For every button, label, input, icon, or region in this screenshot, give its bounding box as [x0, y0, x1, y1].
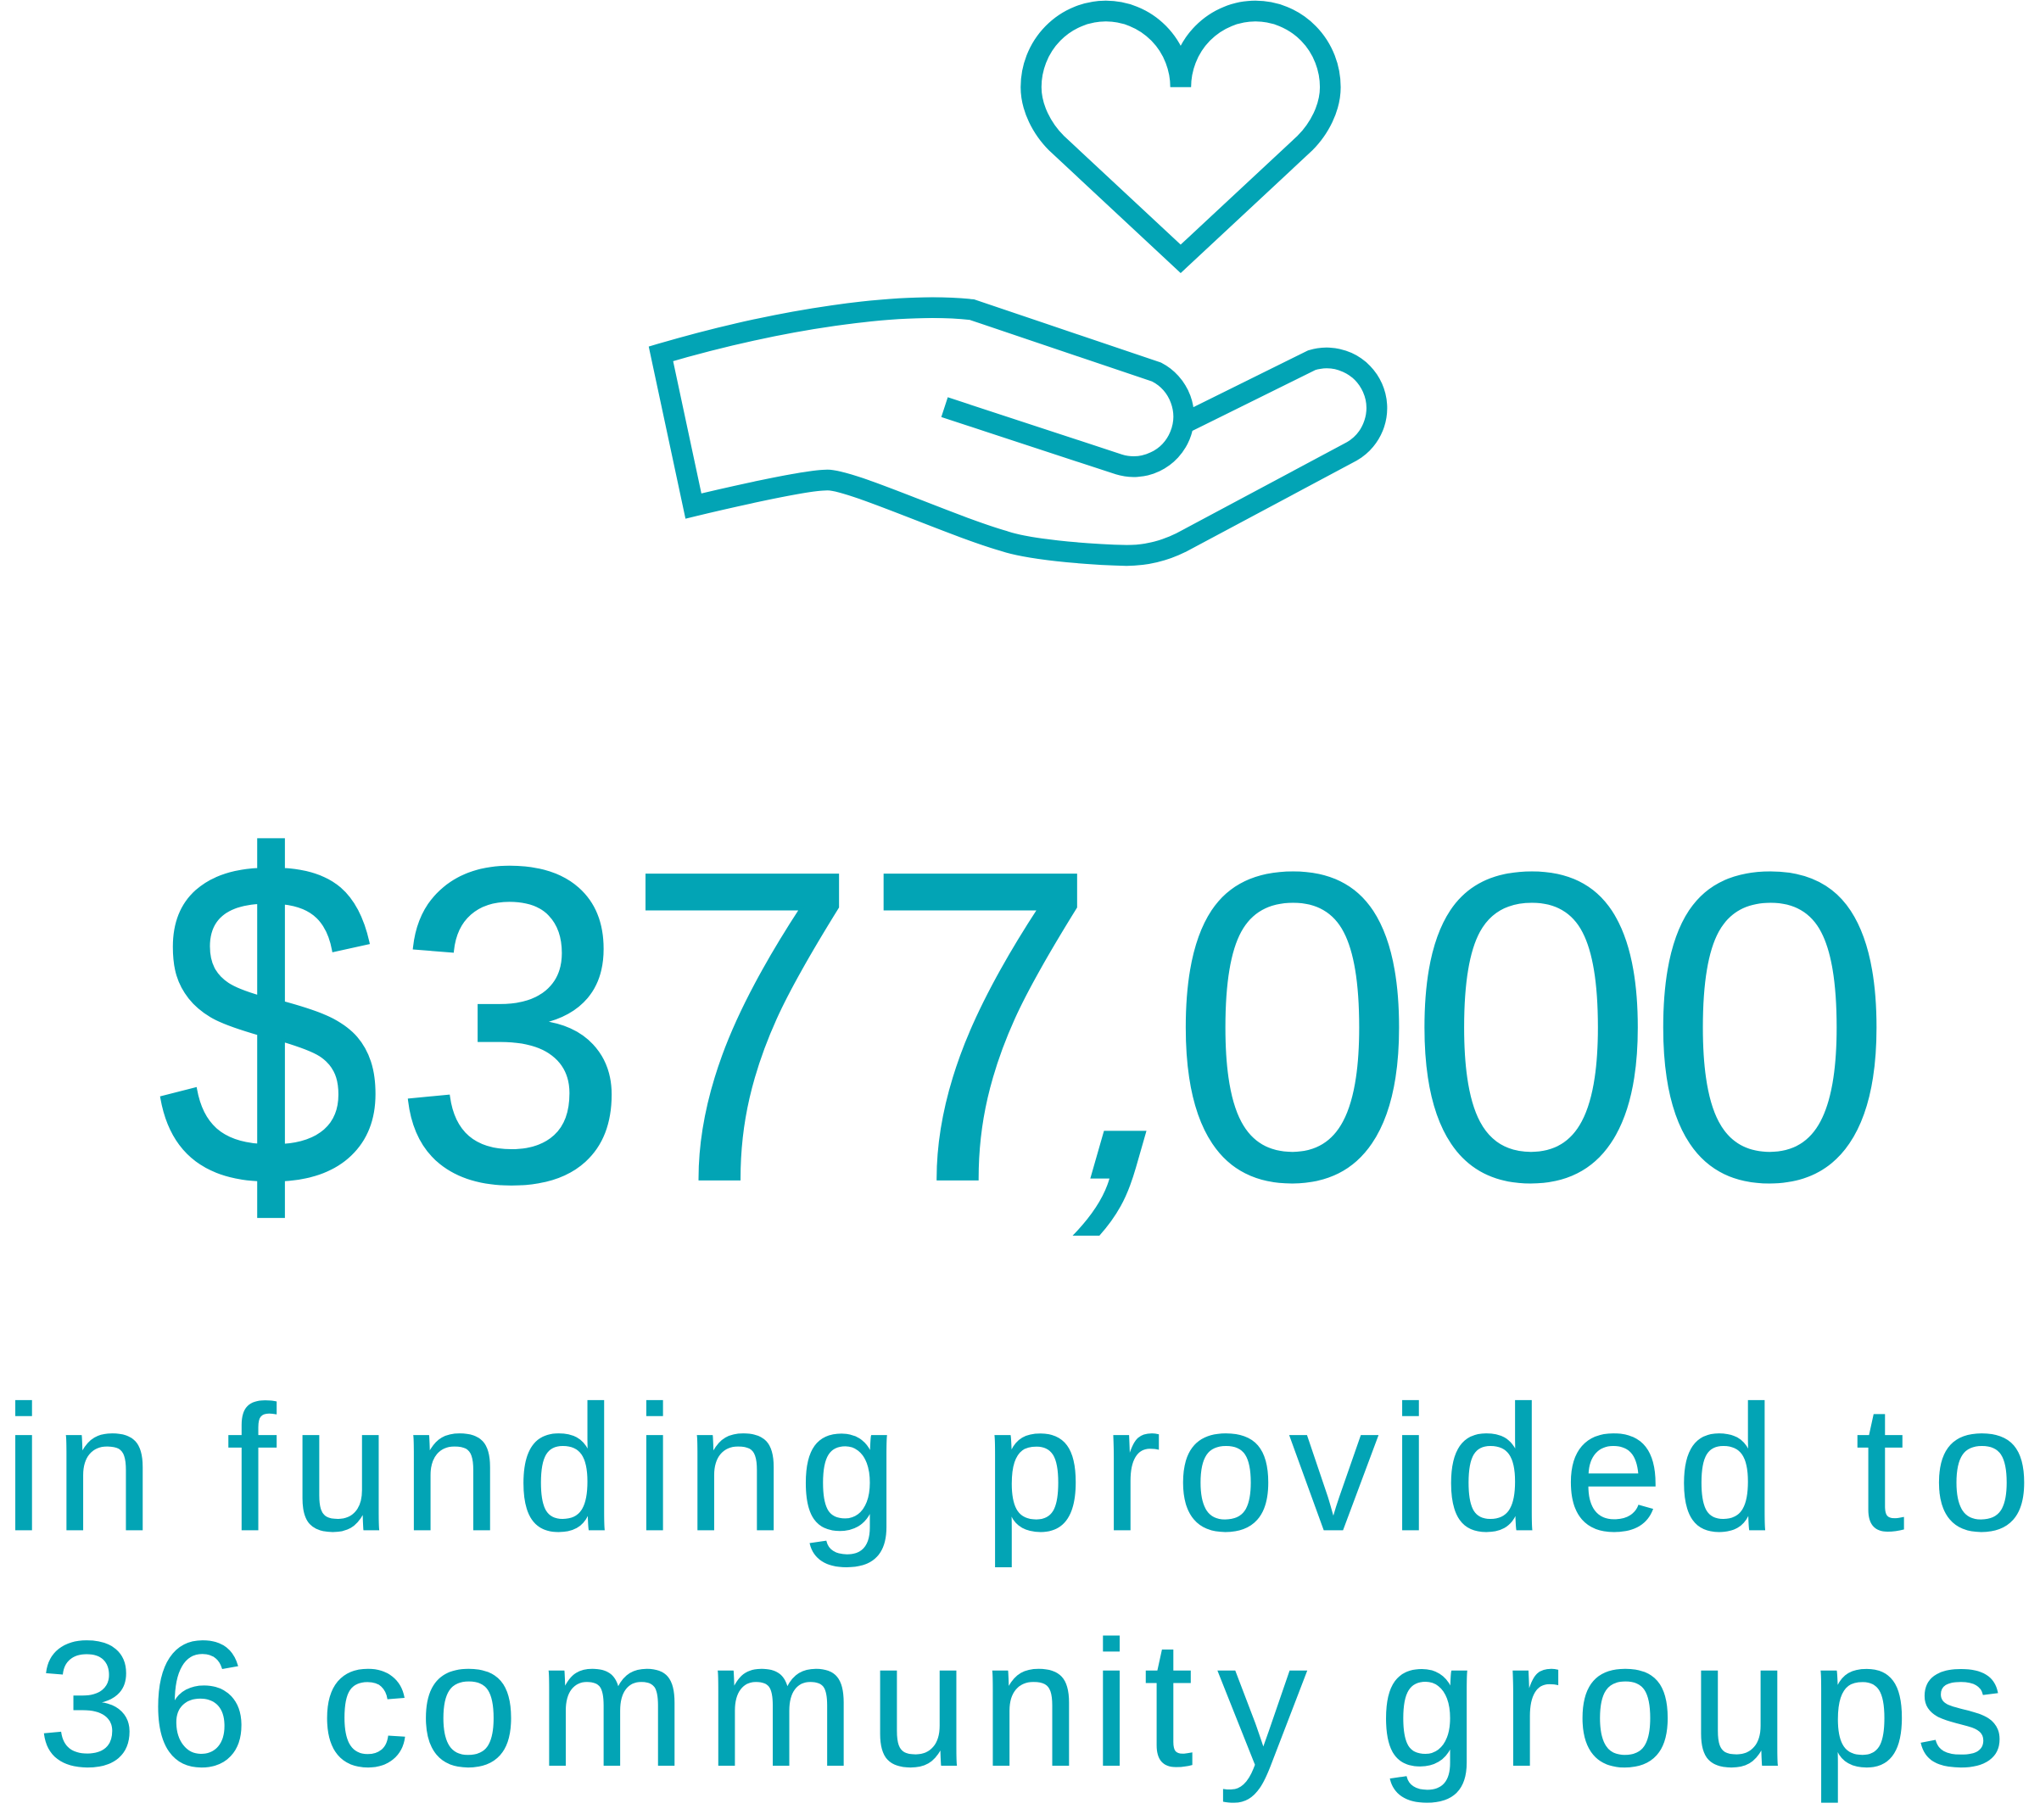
- amount digits: [158, 765, 1096, 1283]
- icon: heart above open hand: [661, 11, 1377, 555]
- caption: [4, 1369, 2032, 1803]
- icon: hand outline: [661, 308, 1377, 555]
- caption line 1: in funding provided to: [4, 1369, 2032, 1568]
- icon: heart: [1031, 11, 1330, 259]
- amount zeros: 000: [1168, 780, 1894, 1273]
- amount comma: ,: [1022, 774, 1288, 1273]
- funding amount: [158, 765, 1894, 1283]
- caption line 2: 36 community groups: [37, 1604, 2005, 1803]
- amount digits: 3: [394, 777, 629, 1274]
- amount digits: 7: [626, 781, 858, 1272]
- amount digits: $: [158, 765, 380, 1283]
- amount digits: 7: [864, 781, 1096, 1272]
